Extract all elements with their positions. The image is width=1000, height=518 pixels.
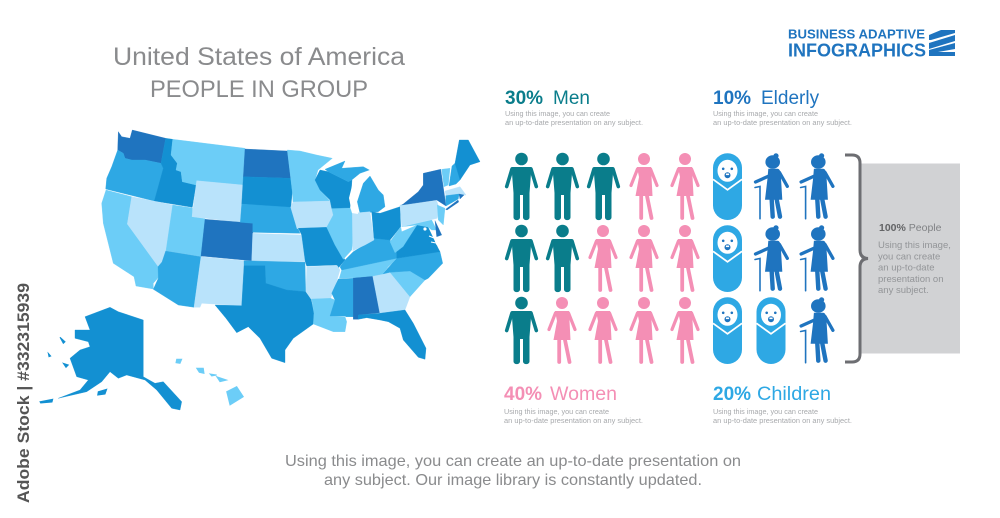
- washington: [118, 130, 166, 163]
- alabama: [353, 276, 380, 319]
- legend: men: 30%: [505, 88, 543, 109]
- legend: elderly: Elderly: [761, 88, 820, 109]
- summary panel: 100% people: Using this image,: [878, 240, 951, 251]
- kentucky: [340, 238, 397, 270]
- idaho: [154, 138, 196, 207]
- massachusetts: [445, 187, 466, 196]
- legend: elderly: [713, 88, 852, 127]
- legend: men: an up-to-date presentation on any subject.: [505, 120, 643, 127]
- alaska islands: [40, 337, 107, 403]
- logo: business adaptive infographics: INFOGRAPHICS: [788, 40, 926, 60]
- utah: [166, 205, 205, 256]
- north carolina: [383, 252, 443, 280]
- connecticut: [446, 194, 459, 206]
- vermont: [442, 168, 450, 187]
- summary panel: 100% people: an up-to-date: [878, 262, 935, 274]
- maine: [455, 140, 480, 180]
- rhode island: [459, 194, 464, 199]
- south dakota: [242, 177, 292, 208]
- logo: business adaptive infographics: BUSINESS ADAPTIVE: [788, 28, 925, 42]
- arkansas: [306, 266, 340, 299]
- tennessee: [339, 258, 397, 278]
- oregon: [106, 150, 163, 201]
- legend: children: an up-to-date presentation on any subject.: [713, 418, 852, 425]
- california: [102, 190, 158, 289]
- missouri: [298, 227, 345, 268]
- footer text: any subject. Our image library is constantly updated.: [324, 472, 702, 489]
- legend: men: Using this image, you can create: [505, 111, 610, 118]
- north dakota: [243, 149, 291, 178]
- nevada: [127, 197, 173, 267]
- minnesota: [287, 150, 332, 202]
- bracket: [845, 155, 868, 362]
- ohio: [372, 207, 401, 240]
- legend: children: [713, 384, 852, 425]
- south carolina: [390, 271, 425, 297]
- michigan lower: [357, 176, 385, 213]
- new york: [402, 169, 446, 206]
- summary panel: 100% people: presentation on: [878, 274, 944, 285]
- texas: [215, 266, 314, 363]
- oklahoma: [244, 261, 306, 292]
- kansas: [252, 233, 305, 262]
- legend: men: Men: [553, 88, 590, 109]
- pictogram grid of people: [507, 153, 833, 364]
- montana: [171, 139, 245, 185]
- footer text: Using this image, you can create an up-to-date presentation on: [285, 453, 741, 470]
- stock credit: Adobe Stock | #332315939: [14, 283, 33, 503]
- michigan upper: [325, 161, 369, 182]
- legend: women: Women: [550, 384, 617, 405]
- summary panel: 100% people: you can create: [878, 251, 940, 262]
- title: [113, 43, 405, 103]
- new mexico: [194, 257, 244, 307]
- louisiana: [312, 298, 347, 332]
- delaware: [435, 221, 442, 237]
- arizona: [153, 251, 201, 307]
- new hampshire: [449, 163, 460, 186]
- mississippi: [330, 278, 353, 317]
- title: PEOPLE IN GROUP: [150, 76, 368, 103]
- legend: children: Children: [757, 384, 831, 405]
- virginia: [397, 225, 440, 258]
- chesapeake bay and dc star: [429, 231, 437, 245]
- summary panel: 100% people: any subject.: [878, 285, 929, 296]
- legend: men: [505, 88, 643, 127]
- legend: elderly: Using this image, you can create: [713, 111, 818, 118]
- colorado: [201, 219, 253, 261]
- pennsylvania: [400, 201, 439, 227]
- legend: women: 40%: [504, 384, 542, 405]
- map of the USA: [40, 130, 480, 410]
- hawaii: [176, 359, 243, 405]
- legend: women: Using this image, you can create: [504, 409, 609, 416]
- georgia: [373, 272, 410, 314]
- legend: children: 20%: [713, 384, 751, 405]
- illinois: [327, 208, 353, 259]
- west virginia: [390, 225, 417, 253]
- legend: women: [504, 384, 643, 425]
- summary panel: 100% people: [861, 164, 960, 354]
- maryland: [402, 220, 437, 230]
- florida: [358, 310, 426, 359]
- footer text: [285, 453, 741, 489]
- summary panel: 100% people: 100% People: [879, 222, 942, 234]
- legend: women: an up-to-date presentation on any subject.: [504, 418, 643, 425]
- logo: business adaptive infographics: [788, 28, 955, 60]
- wisconsin: [315, 170, 352, 208]
- iowa: [291, 201, 333, 229]
- new jersey: [437, 205, 445, 225]
- legend: children: Using this image, you can create: [713, 409, 818, 416]
- great lakes gap: [349, 173, 367, 214]
- long island: [446, 200, 459, 210]
- alaska: [58, 307, 182, 410]
- title: United States of America: [113, 43, 405, 71]
- legend: elderly: an up-to-date presentation on any subject.: [713, 120, 852, 127]
- wyoming: [192, 181, 243, 222]
- indiana: [352, 212, 374, 251]
- nebraska: [240, 204, 300, 233]
- legend: elderly: 10%: [713, 88, 751, 109]
